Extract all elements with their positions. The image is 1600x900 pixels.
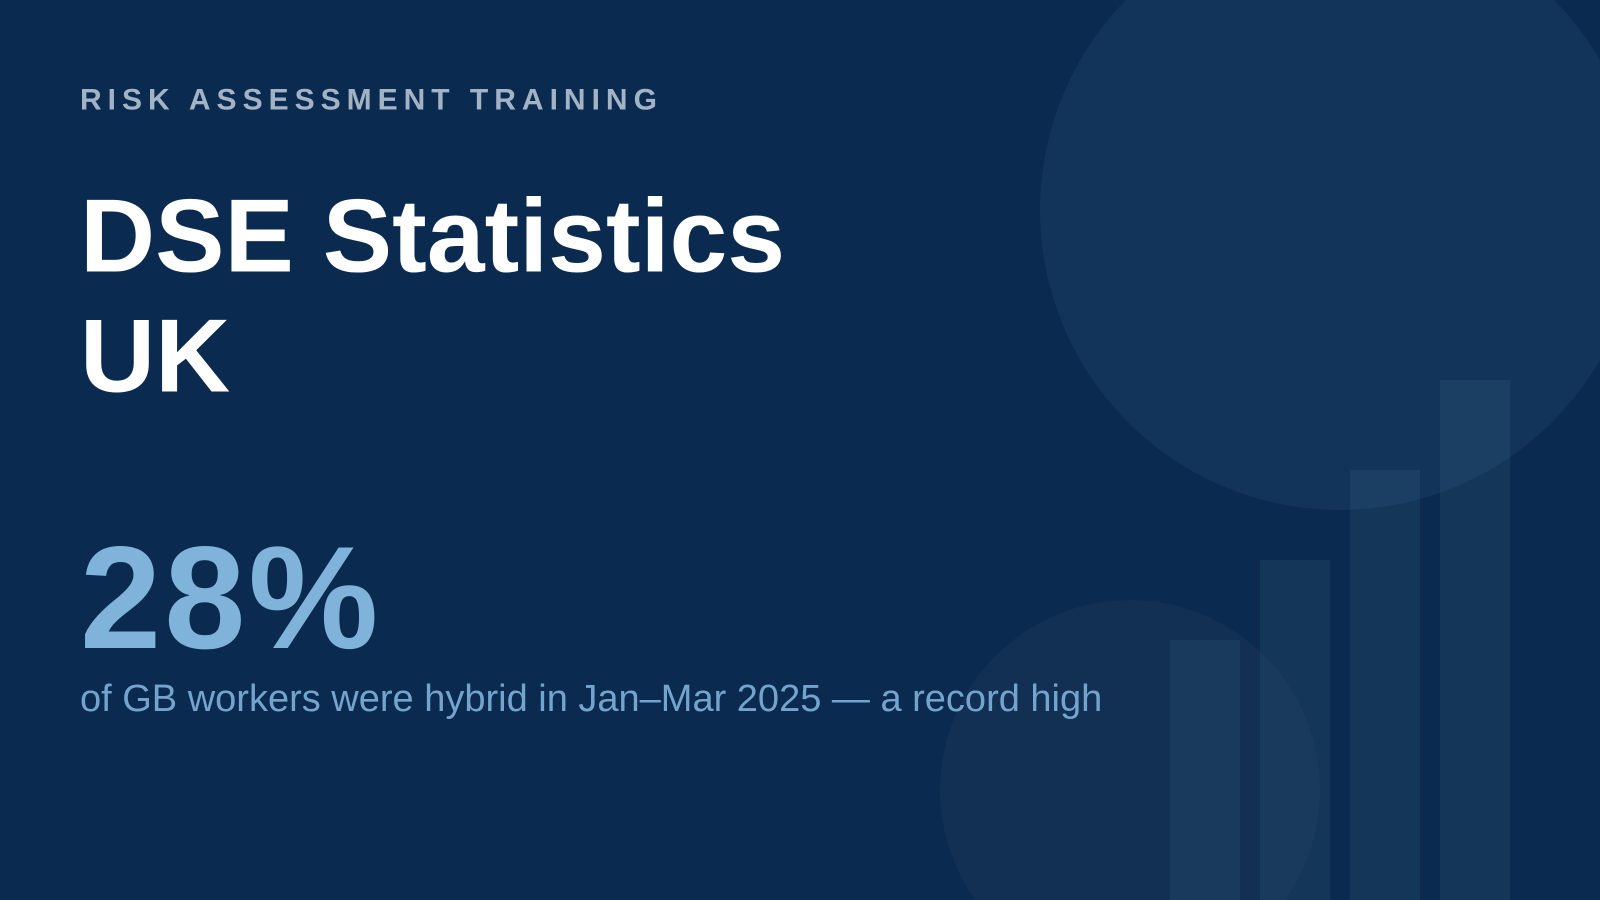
key statistic: 28% (80, 516, 381, 679)
bar chart motif (1170, 380, 1510, 900)
eyebrow label: RISK ASSESSMENT TRAINING (80, 84, 663, 117)
title: DSE Statistics (80, 179, 785, 295)
statistic description: of GB workers were hybrid in Jan–Mar 2025 — a record high (80, 678, 1102, 720)
title (80, 179, 785, 415)
decorative circle: bottom (940, 600, 1320, 900)
decorative circle: top right (1040, 0, 1600, 510)
title: UK (80, 299, 230, 415)
